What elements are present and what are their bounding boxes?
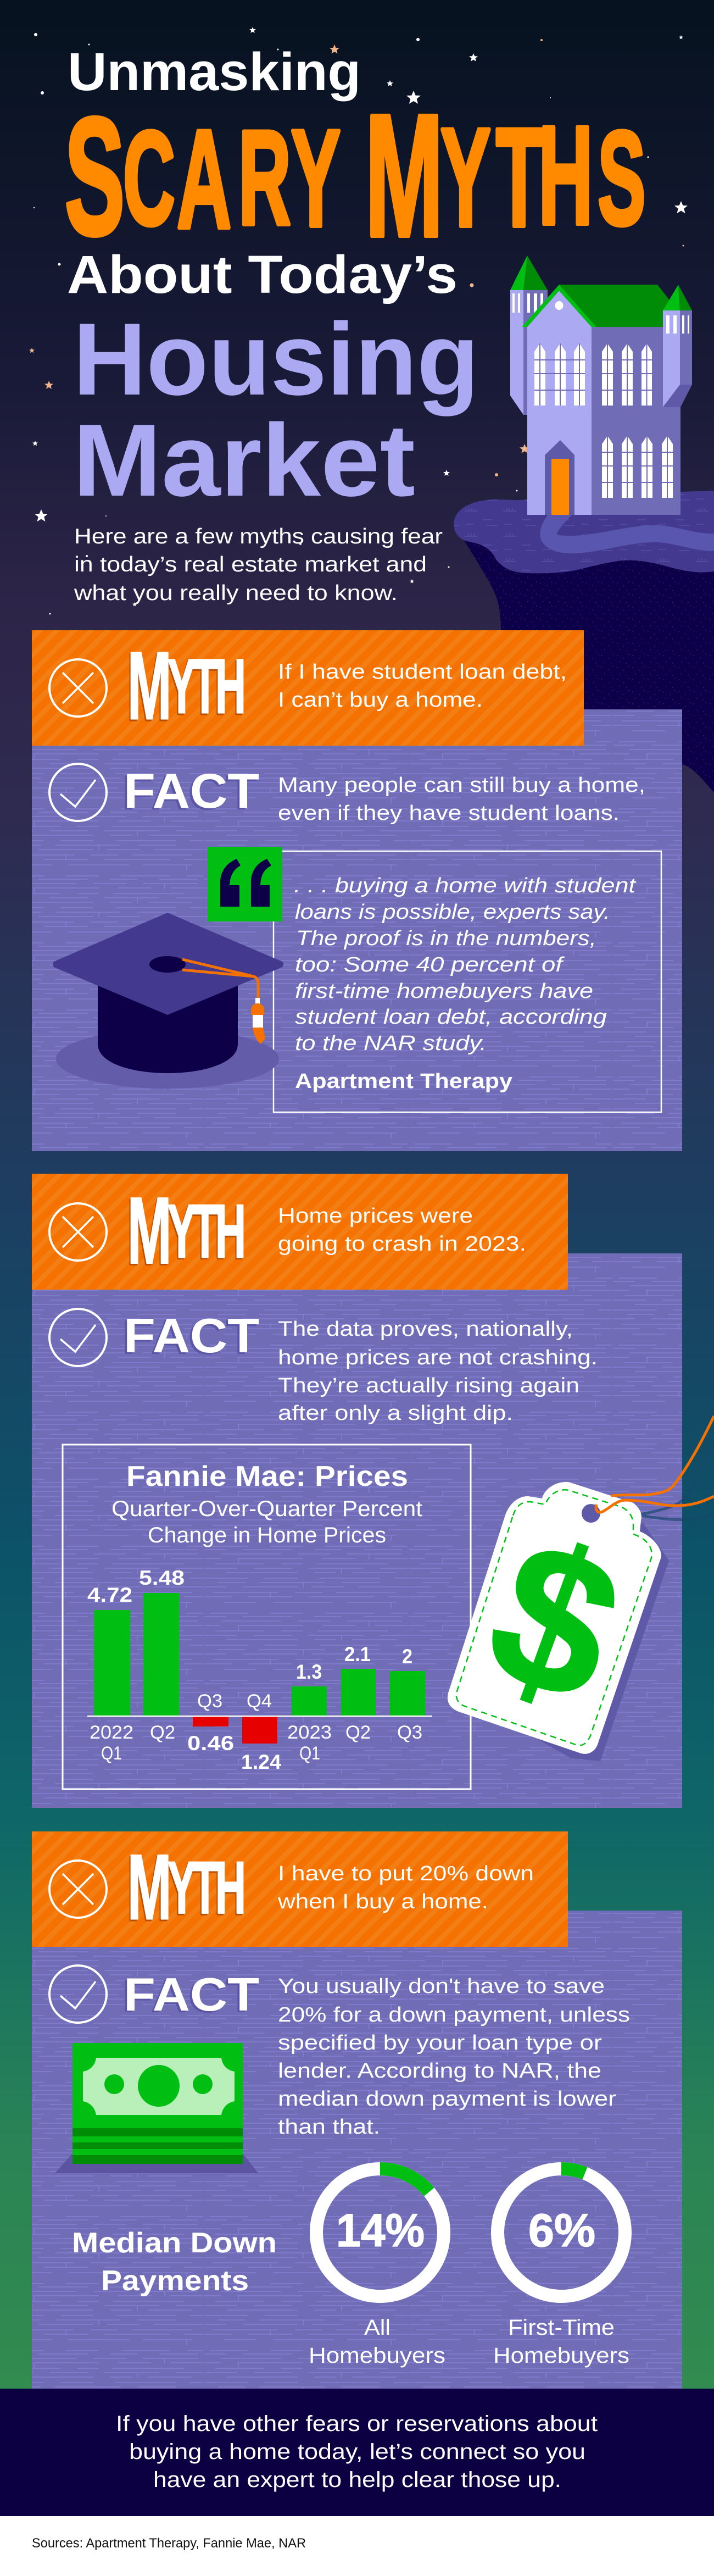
title line: Unmasking: Unmasking	[68, 42, 361, 102]
sources: Sources: Apartment Therapy, Fannie Mae, NAR	[32, 2536, 306, 2551]
fact 2 heading	[49, 1308, 598, 1425]
fact statement: specified by your loan type or	[278, 2031, 602, 2055]
tag body	[448, 1482, 661, 1754]
title	[65, 42, 646, 518]
chart subtitle	[111, 1497, 422, 1547]
myth statement	[278, 660, 567, 712]
value labels: 0.46	[187, 1732, 234, 1755]
fact statement: than that.	[278, 2116, 380, 2139]
myth logo: Y	[168, 1847, 196, 1929]
upper window mullions	[534, 343, 652, 406]
value labels	[87, 1567, 412, 1773]
island path	[540, 515, 714, 553]
myth statement: when I buy a home.	[277, 1890, 488, 1913]
quarter labels	[90, 1691, 422, 1764]
donut label: All	[364, 2316, 391, 2340]
title line: Scary Myths: A	[177, 101, 231, 258]
main side wall	[592, 327, 680, 515]
title line: Scary Myths: R	[238, 103, 291, 253]
icon: stack of money	[55, 2043, 258, 2173]
quote text	[294, 874, 637, 1055]
quarter labels: Q4	[247, 1691, 272, 1712]
quote text: loans is possible, experts say.	[295, 901, 610, 924]
chart subtitle: Change in Home Prices	[148, 1523, 386, 1547]
value labels: 1.24	[241, 1751, 281, 1773]
quote text: too: Some 40 percent of	[295, 953, 565, 976]
chart subtitle: Quarter-Over-Quarter Percent	[111, 1497, 422, 1521]
intro text	[74, 525, 443, 605]
dollar sign: $	[463, 1495, 646, 1747]
tag dashed stitching	[456, 1490, 652, 1745]
fact label: FACT	[124, 763, 259, 818]
panel: myth 3 fact background	[32, 1911, 682, 2389]
quarter labels: 2023	[287, 1722, 332, 1743]
quarter labels: Q2	[345, 1722, 371, 1743]
donut label	[493, 2316, 629, 2368]
myth logo: T	[192, 1847, 218, 1929]
icon: check in circle	[49, 1966, 107, 2023]
panel: myth 3 banner	[32, 1831, 568, 1947]
icon: x in circle	[49, 659, 107, 717]
icon: price tag	[448, 1416, 714, 1761]
fact statement: even if they have student loans.	[278, 802, 620, 825]
myth statement	[277, 1862, 534, 1913]
door surround	[545, 440, 574, 515]
quarter labels: Q3	[197, 1691, 222, 1712]
title line: About Today's: About Today’s	[67, 245, 458, 304]
fact 3 heading	[49, 1966, 630, 2139]
left tower	[510, 256, 548, 415]
main front wall	[527, 291, 592, 515]
median down payments heading: Median Down	[72, 2227, 277, 2259]
fact statement: You usually don't have to save	[278, 1975, 605, 1998]
myth statement: I have to put 20% down	[278, 1862, 534, 1885]
lower window mullions	[602, 436, 673, 498]
donut label: Homebuyers	[493, 2344, 629, 2368]
negative bars	[193, 1717, 277, 1744]
quote text: . . . buying a home with student	[294, 874, 637, 897]
donut chart: 6% first-time homebuyers	[493, 2169, 629, 2368]
footer call to action	[0, 2389, 714, 2516]
footer call to action: If you have other fears or reservations about	[116, 2412, 598, 2436]
orange strings	[596, 1416, 714, 1512]
quote text: student loan debt, according	[295, 1006, 607, 1029]
fact statement: Many people can still buy a home,	[278, 774, 645, 797]
donut chart: 14% all homebuyers	[309, 2169, 445, 2368]
bar chart: Fannie Mae prices	[63, 1445, 471, 1789]
title line: Scary Myths	[65, 78, 646, 273]
fact statement: median down payment is lower	[278, 2088, 616, 2111]
string shadows	[639, 1444, 714, 1520]
fact statement: They’re actually rising again	[278, 1374, 579, 1397]
value labels: 4.72	[87, 1584, 132, 1606]
quote text: The proof is in the numbers,	[296, 927, 596, 950]
panel: myth 1 banner	[32, 630, 584, 746]
myth logo: T	[192, 643, 218, 729]
lower windows	[602, 436, 673, 498]
title line: Scary Myths: M	[365, 78, 443, 273]
myth logo: H	[215, 1847, 246, 1929]
myth logo	[127, 1836, 246, 1939]
island cliff	[463, 538, 714, 824]
quarter labels: Q1	[299, 1743, 320, 1764]
myth logo	[127, 631, 246, 739]
myth logo: Y	[168, 1189, 196, 1273]
icon: x in circle	[49, 1861, 107, 1918]
gable oval window	[555, 301, 564, 310]
quote attribution: Apartment Therapy	[295, 1070, 512, 1093]
fact statement: after only a slight dip.	[278, 1402, 513, 1425]
fact statement	[278, 1975, 630, 2139]
myth statement: If I have student loan debt,	[278, 660, 567, 684]
title line: Market: Market	[73, 403, 415, 518]
bars	[94, 1593, 425, 1716]
median down payments heading: Payments	[101, 2265, 249, 2297]
myth statement: going to crash in 2023.	[278, 1233, 526, 1256]
quote box outline	[274, 851, 661, 1112]
door	[551, 459, 569, 515]
title line: Scary Myths: H	[538, 97, 593, 254]
value labels: 1.3	[296, 1661, 322, 1683]
icon: graduation cap	[53, 913, 283, 1089]
title line: Scary Myths: S	[65, 83, 125, 270]
footer call to action: buying a home today, let’s connect so you	[129, 2440, 585, 2464]
icon: x in circle	[49, 1203, 107, 1261]
title line: Scary Myths: T	[496, 99, 542, 256]
myth logo: M	[127, 1178, 171, 1284]
tag shadow	[494, 1522, 669, 1761]
donut label: First-Time	[508, 2316, 615, 2340]
myth logo: M	[127, 1836, 171, 1939]
quote text: first-time homebuyers have	[295, 980, 593, 1003]
fact label: FACT	[124, 1969, 259, 2021]
white sources strip	[0, 2516, 714, 2576]
donut label	[309, 2316, 445, 2368]
myth logo: H	[215, 1189, 246, 1273]
icon: green quote mark	[208, 847, 282, 921]
tag hole	[582, 1504, 600, 1523]
island top with grass	[454, 491, 714, 573]
myth statement: Home prices were	[278, 1204, 473, 1228]
donut value: 14%	[336, 2205, 425, 2256]
panel: myth 1 fact background	[32, 709, 682, 1151]
footer call to action: have an expert to help clear those up.	[153, 2468, 561, 2492]
intro text: Here are a few myths causing fear	[74, 525, 443, 548]
axis	[87, 1716, 432, 1717]
myth logo: H	[215, 643, 246, 729]
donut label: Homebuyers	[309, 2344, 445, 2368]
median down payments heading	[72, 2227, 277, 2297]
fact label: FACT	[124, 1308, 259, 1363]
value labels: 2.1	[344, 1643, 371, 1665]
fact 1 heading	[49, 763, 645, 825]
icon: check in circle	[49, 764, 107, 821]
fact statement	[278, 1318, 598, 1425]
myth statement: I can’t buy a home.	[278, 689, 483, 712]
quarter labels: 2022	[90, 1722, 133, 1743]
quarter labels: Q3	[397, 1722, 422, 1743]
title line: Scary Myths: Y	[440, 99, 491, 256]
upper windows	[534, 343, 652, 406]
quarter labels: Q1	[101, 1743, 122, 1764]
myth logo: Y	[168, 643, 196, 729]
gable trim	[522, 285, 596, 327]
main roof	[559, 285, 669, 327]
myth statement	[278, 1204, 526, 1256]
myth logo	[127, 1178, 246, 1284]
title line: Scary Myths: C	[123, 104, 175, 253]
myth logo: M	[127, 631, 171, 739]
fact statement: The data proves, nationally,	[278, 1318, 573, 1341]
value labels: 2	[402, 1645, 412, 1668]
panel: myth 2 banner	[32, 1174, 568, 1290]
fact statement: 20% for a down payment, unless	[278, 2003, 630, 2027]
fact statement: lender. According to NAR, the	[278, 2059, 601, 2083]
intro text: in today’s real estate market and	[74, 553, 427, 576]
quote text: to the NAR study.	[295, 1032, 487, 1055]
panel: myth 2 fact background	[32, 1253, 682, 1808]
title line: Scary Myths: S	[598, 104, 646, 253]
title line: Scary Myths: Y	[291, 101, 360, 256]
donut value: 6%	[528, 2205, 595, 2256]
title line: Housing: Housing	[73, 302, 479, 417]
fact statement	[278, 774, 645, 825]
right tower	[663, 285, 692, 407]
chart title: Fannie Mae: Prices	[126, 1461, 408, 1492]
myth logo: T	[192, 1189, 218, 1273]
fact statement: home prices are not crashing.	[278, 1346, 598, 1369]
intro text: what you really need to know.	[74, 581, 398, 605]
quarter labels: Q2	[150, 1722, 175, 1743]
starry sky	[29, 27, 688, 614]
haunted house illustration	[510, 256, 692, 515]
value labels: 5.48	[139, 1567, 185, 1589]
icon: check in circle	[49, 1309, 107, 1366]
